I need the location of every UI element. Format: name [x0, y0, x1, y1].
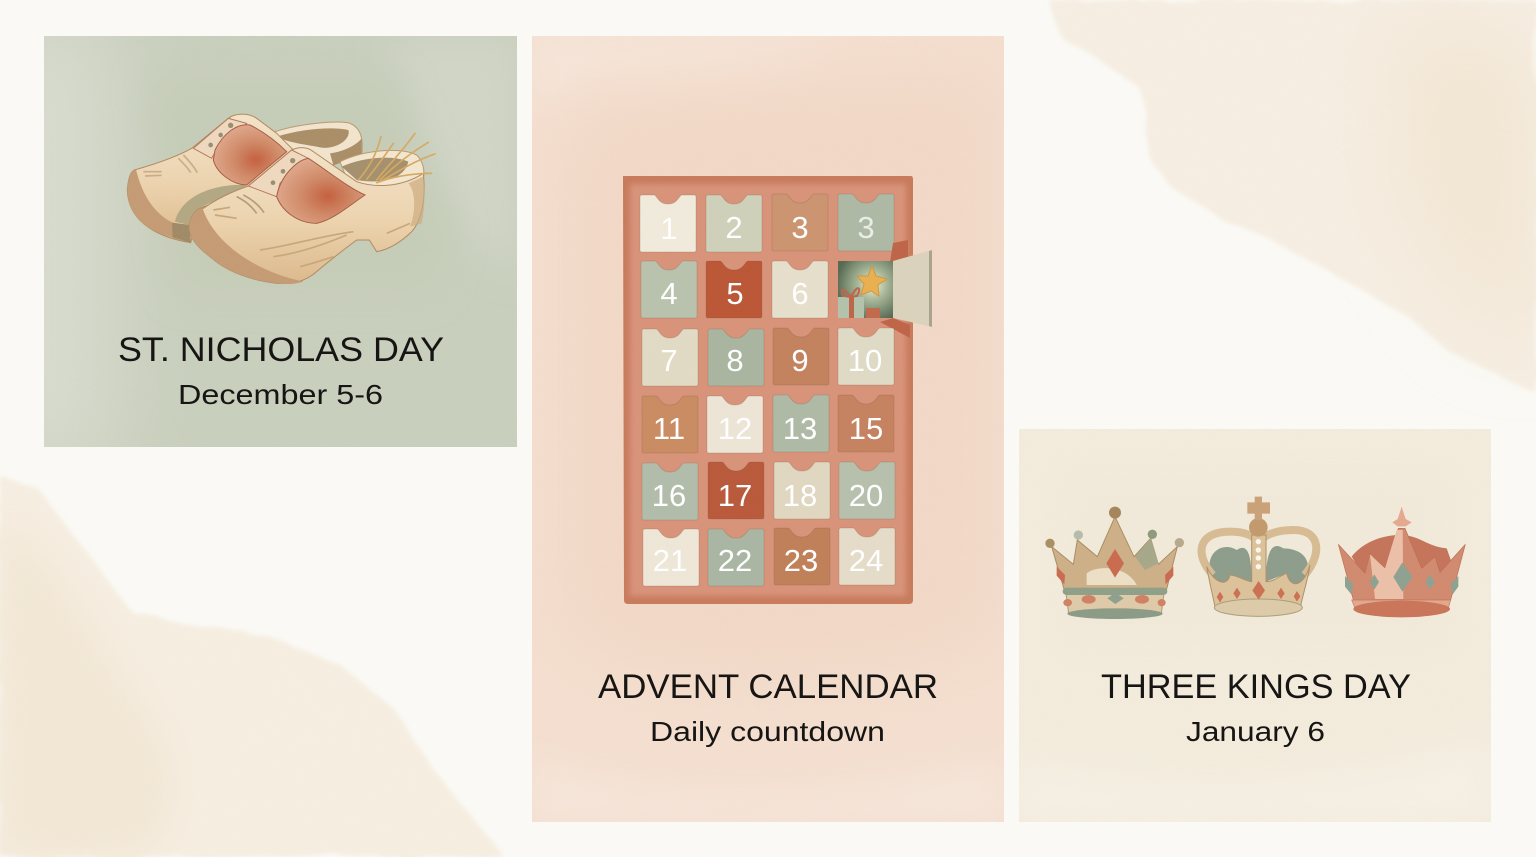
crown 2	[1202, 497, 1316, 616]
date text: December 5-6	[178, 379, 383, 410]
door 6: 6	[791, 276, 809, 311]
door 11: 11	[653, 411, 685, 446]
door 5	[706, 261, 762, 318]
icon: three crowns	[1045, 497, 1465, 619]
door 20	[839, 462, 895, 519]
door 21	[643, 529, 699, 586]
door 23: 23	[784, 543, 818, 578]
door 2: 2	[725, 210, 743, 245]
date text: January 6	[1186, 716, 1325, 747]
door 3	[772, 194, 828, 251]
door 23	[774, 528, 830, 585]
heading: ADVENT CALENDAR	[598, 668, 938, 706]
door 3 duplicate	[838, 194, 894, 251]
door 18	[774, 462, 830, 519]
door 7	[642, 329, 698, 386]
subtitle: Daily countdown	[650, 716, 885, 747]
panel: St. Nicholas Day	[44, 36, 517, 447]
door 7: 7	[660, 343, 678, 378]
watercolor wash: bottom left	[0, 475, 505, 857]
icon: wooden clogs	[127, 114, 435, 284]
front clog	[189, 148, 424, 284]
illustration: advent calendar	[623, 176, 932, 604]
door 18: 18	[783, 478, 817, 513]
door 22: 22	[718, 543, 752, 578]
door 21: 21	[653, 543, 687, 578]
door 16	[642, 463, 698, 520]
door 1	[640, 195, 696, 252]
door 10	[838, 328, 894, 385]
door 8: 8	[726, 343, 744, 378]
door 12: 12	[718, 411, 752, 446]
door 12	[707, 396, 763, 453]
door 15	[838, 395, 894, 452]
watercolor wash: top right	[1050, 0, 1536, 392]
door 20: 20	[849, 478, 883, 513]
door 13	[773, 395, 829, 452]
panel: Advent Calendar	[532, 36, 1004, 822]
door 22	[708, 529, 764, 586]
door 9	[773, 328, 829, 385]
door 11	[642, 396, 698, 453]
door 24	[839, 528, 895, 585]
door 24: 24	[849, 543, 883, 578]
back clog	[127, 114, 362, 243]
door 2	[706, 195, 762, 252]
door 16: 16	[652, 478, 686, 513]
heading: THREE KINGS DAY	[1101, 668, 1411, 706]
crown 1	[1045, 507, 1184, 619]
door 15: 15	[849, 411, 883, 446]
door 13: 13	[783, 411, 817, 446]
straw	[358, 133, 435, 183]
heading: ST. NICHOLAS DAY	[118, 331, 444, 369]
door 10: 10	[848, 343, 882, 378]
door 5: 5	[726, 276, 744, 311]
crown 3	[1338, 507, 1465, 617]
door 3 duplicate: 3	[857, 210, 875, 245]
door 4	[641, 261, 697, 318]
door 3: 3	[791, 210, 809, 245]
door 6	[772, 261, 828, 318]
door 4: 4	[660, 276, 678, 311]
open door with star and gift	[838, 240, 932, 338]
door 1: 1	[660, 211, 678, 246]
door 8	[708, 329, 764, 386]
panel: Three Kings Day	[1019, 429, 1491, 822]
door 17	[708, 462, 764, 519]
door 9: 9	[791, 343, 809, 378]
door 17: 17	[718, 478, 752, 513]
